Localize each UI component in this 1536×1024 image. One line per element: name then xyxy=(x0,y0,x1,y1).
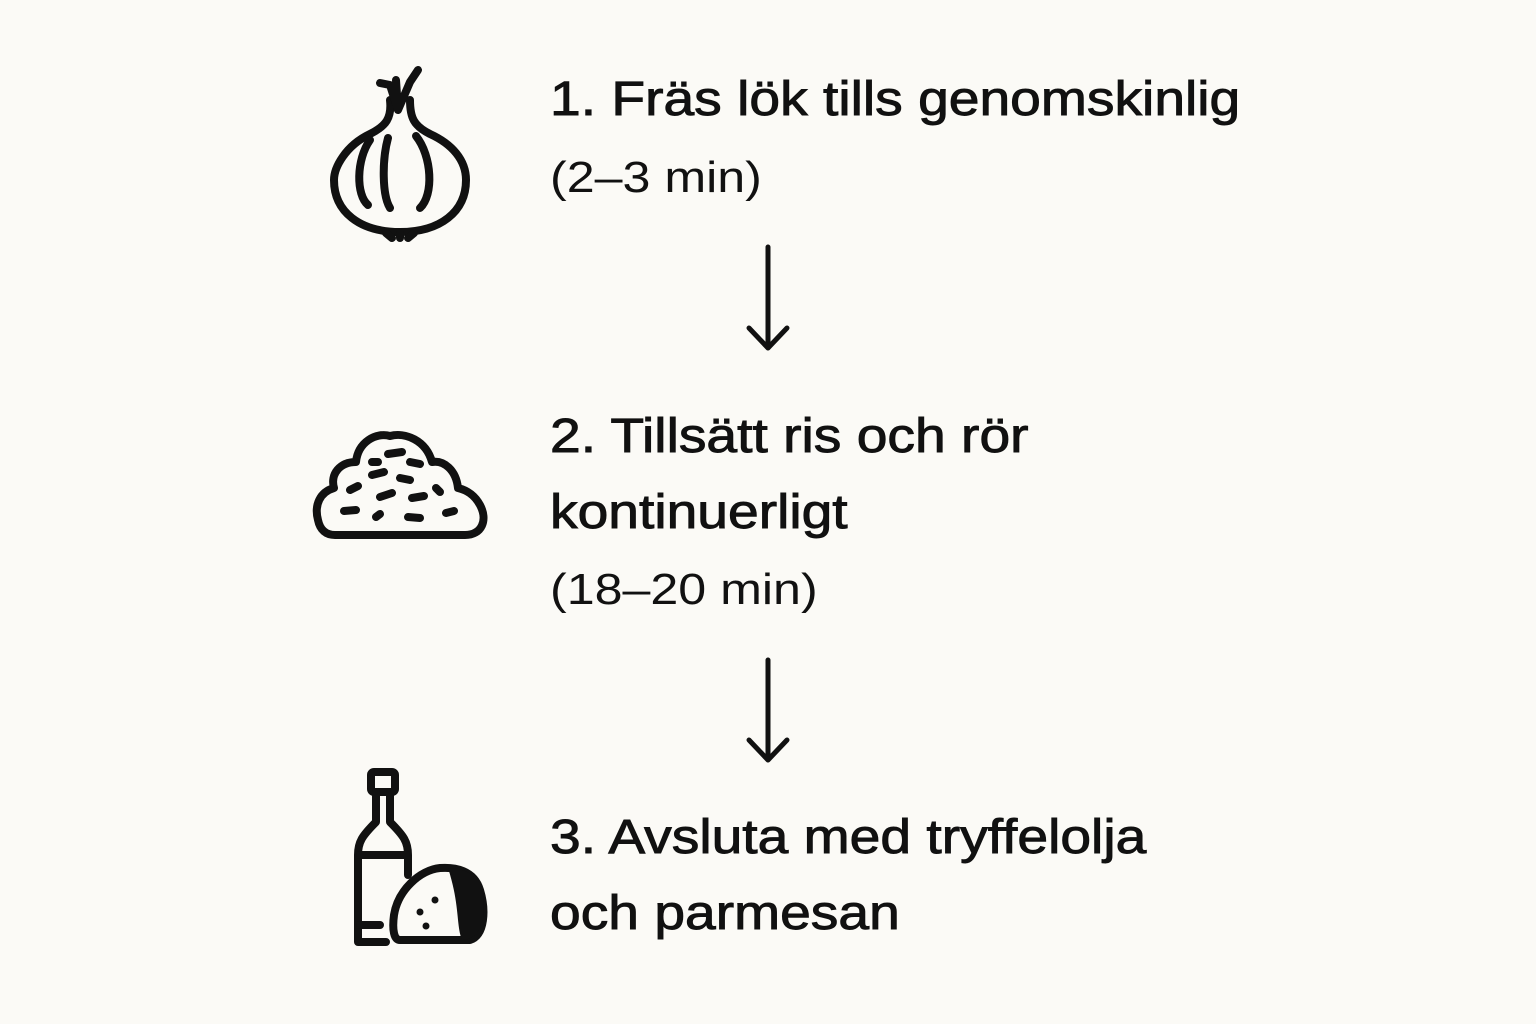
step 2 heading: 2. Tillsätt ris och rör xyxy=(550,410,1029,463)
step 1 time: (2–3 min) xyxy=(550,153,762,202)
step 2 heading: kontinuerligt xyxy=(550,486,848,539)
step 2 time: (18–20 min) xyxy=(550,565,818,614)
step 3 heading xyxy=(550,811,1147,940)
step 1 heading: 1. Fräs lök tills genomskinlig xyxy=(550,73,1240,126)
step 2 heading xyxy=(550,410,1029,539)
step 3 heading: och parmesan xyxy=(550,887,900,940)
step 3 heading: 3. Avsluta med tryffelolja xyxy=(550,811,1146,864)
